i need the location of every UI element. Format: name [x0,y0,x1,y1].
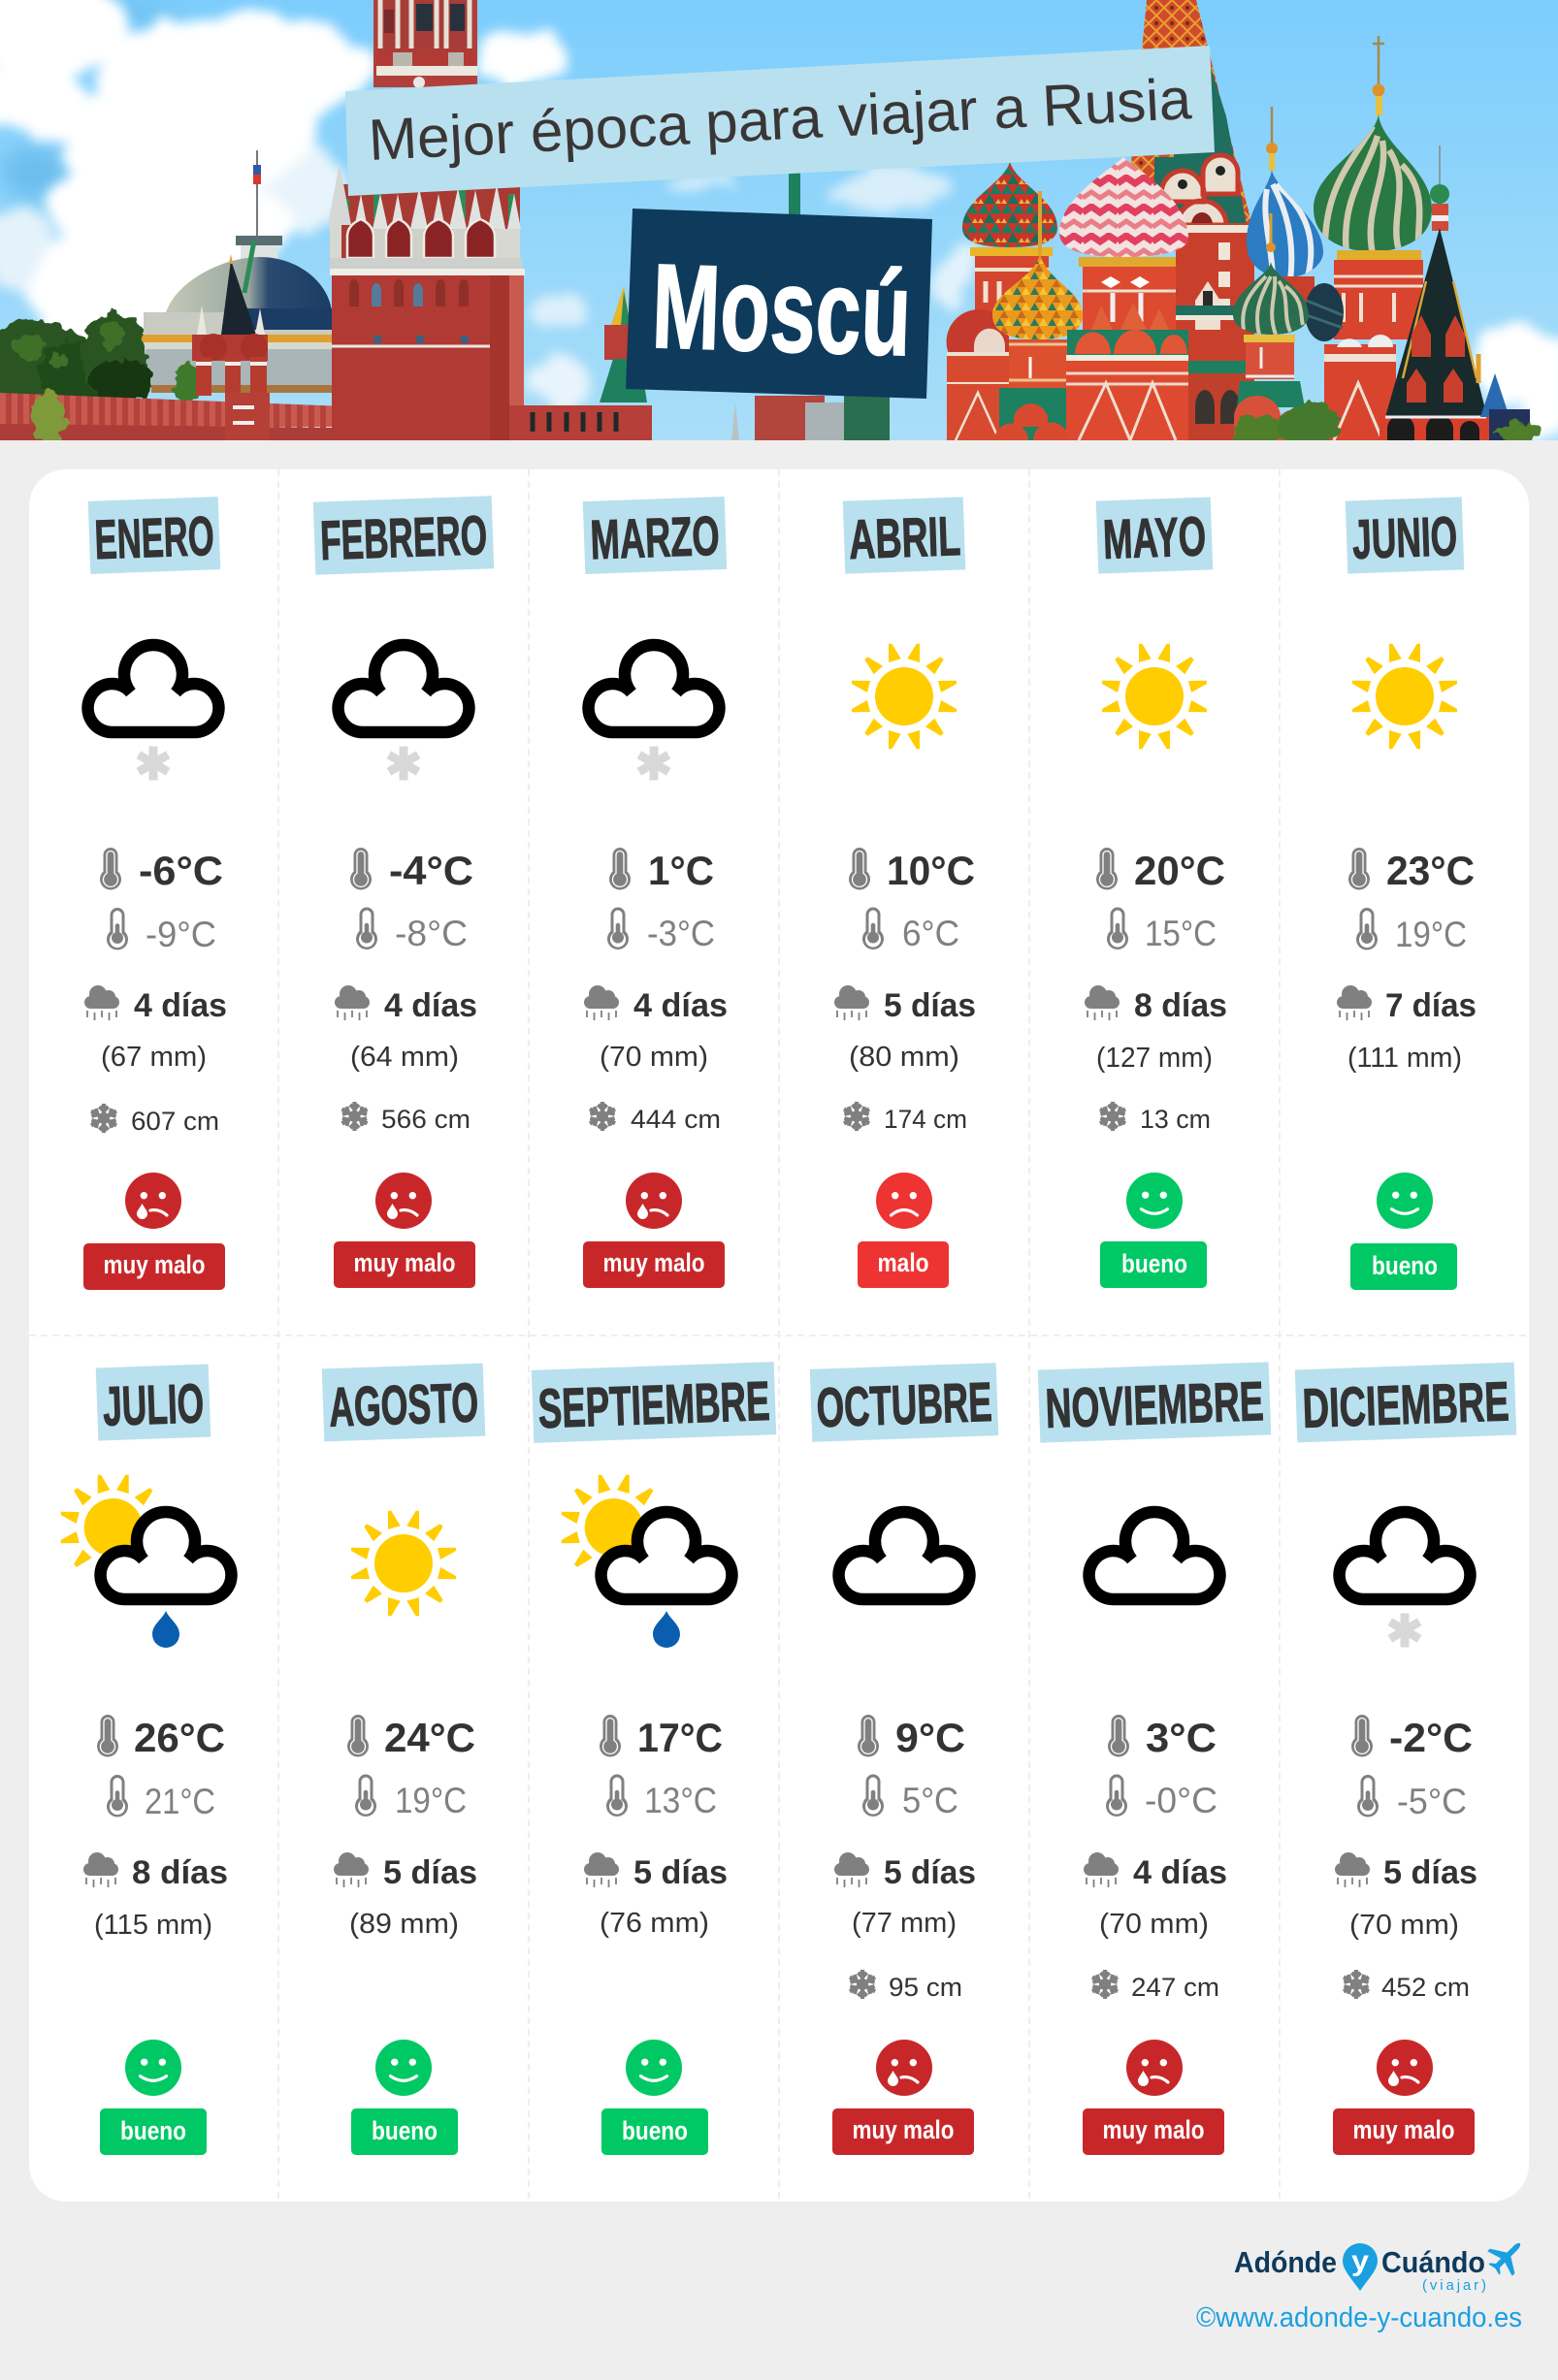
max temperature [1351,1715,1473,1760]
heading: febrero: FEBRERO [319,504,488,572]
rainfall: (127 mm) [1096,1043,1213,1074]
min temperature [606,1775,717,1820]
max temperature [849,848,975,893]
rating: muy malo: muy malo [353,1248,456,1277]
icon: happy face [375,2040,432,2096]
tower base between [1188,393,1239,440]
snowfall: 444 cm [631,1105,721,1134]
logo: Adónde y Cuándo viajar: Adónde [1234,2245,1337,2279]
max temperature: 3°C [1146,1715,1217,1760]
min temperature [355,1775,467,1820]
icon: cloud [1089,1512,1219,1599]
max temperature: 17°C [637,1715,723,1760]
min temperature [862,1775,958,1820]
rainy days: 5 días [633,1854,728,1891]
big green onion [1378,36,1379,92]
rating: malo [858,1241,949,1288]
icon: happy face [1126,1173,1183,1229]
rainfall: (115 mm) [94,1910,212,1941]
rating: bueno [351,2108,458,2155]
Kremlin wall, left [0,388,332,440]
max temperature [100,848,223,893]
clouds [0,0,1558,436]
rainfall: (89 mm) [349,1909,459,1940]
snowfall [842,1102,967,1134]
icon: crying face [1377,2040,1433,2096]
icon: crying face [1126,2040,1183,2096]
title banner [345,46,1215,196]
heading: febrero [313,496,494,575]
month: mayo [1085,497,1227,1288]
rating: muy malo [334,1241,475,1288]
min temperature [107,1775,215,1821]
rainy days [335,985,477,1024]
rating: bueno: bueno [120,2116,186,2145]
title banner: Mejor época para viajar a Rusia [367,66,1193,173]
min temperature [107,908,216,954]
rating: bueno: bueno [372,2116,438,2145]
min temperature: 5°C [902,1781,958,1820]
min temperature: 6°C [902,914,959,953]
rainfall: (70 mm) [600,1042,708,1073]
max temperature [600,1715,723,1760]
max temperature: 26°C [134,1715,225,1760]
icon: cloud with snow [339,645,469,780]
icon: sad face [876,1173,932,1229]
snowfall: 452 cm [1381,1973,1470,2002]
snowfall [1098,1102,1211,1134]
rainy days: 4 días [384,987,477,1024]
max temperature: -2°C [1389,1715,1473,1760]
month: diciembre [1295,1363,1516,2155]
snowfall [89,1104,219,1136]
min temperature: -3°C [647,914,715,953]
rainy days [1337,985,1477,1024]
rainy days: 4 días [1133,1854,1227,1891]
icon: map pin: y [1351,2245,1369,2277]
rainy days [1335,1852,1477,1891]
icon: happy face [626,2040,682,2096]
rainy days: 8 días [132,1854,228,1891]
rainfall: (64 mm) [350,1042,459,1073]
max temperature [1108,1715,1217,1760]
month: febrero [313,496,494,1288]
snowfall [340,1102,471,1134]
rating: muy malo: muy malo [103,1250,206,1279]
rating: bueno [601,2108,708,2155]
rating: muy malo [583,1241,725,1288]
icon: cloud with snow [88,645,218,780]
checker onion and drum [962,162,1057,247]
yellow onion [1038,191,1042,254]
max temperature [350,848,473,893]
max temperature: 10°C [887,848,975,893]
icon: crying face [125,1173,181,1229]
min temperature: -0°C [1145,1781,1217,1820]
snowfall: 566 cm [381,1105,471,1134]
rainy days [834,985,976,1024]
icon: sun [1102,644,1207,749]
dark onion [1305,283,1344,341]
max temperature [1348,848,1475,893]
min temperature [862,908,959,953]
rating: muy malo [832,2108,974,2155]
rainy days: 4 días [134,987,227,1024]
snowfall [1342,1970,1470,2002]
month: junio [1337,497,1477,1290]
month: octubre [810,1363,998,2155]
rainy days [834,1852,976,1891]
heading: junio: JUNIO [1351,505,1458,571]
small green onion [1269,213,1273,242]
rating: bueno: bueno [1372,1251,1438,1280]
rainy days: 7 días [1385,987,1477,1024]
snowfall: 607 cm [131,1107,219,1136]
snowfall: 13 cm [1140,1105,1211,1134]
min temperature: -5°C [1397,1782,1467,1821]
heading: agosto: AGOSTO [328,1371,479,1439]
heading: octubre: OCTUBRE [816,1371,993,1439]
month: noviembre [1038,1362,1271,2155]
heading: octubre [810,1363,998,1442]
rainy days [83,1852,228,1891]
min temperature [1107,908,1217,953]
icon: crying face [626,1173,682,1229]
heading: septiembre: SEPTIEMBRE [537,1370,771,1440]
icon: sun [1352,644,1457,749]
city banner [626,209,932,399]
min temperature: 19°C [1395,915,1467,954]
heading: abril [843,497,965,574]
snowfall: 247 cm [1131,1973,1219,2002]
min temperature [1357,1775,1467,1821]
rainfall: (67 mm) [101,1042,207,1073]
snowfall [848,1970,962,2002]
rating: muy malo [1333,2108,1475,2155]
max temperature: -4°C [389,848,473,893]
max temperature: -6°C [139,848,223,893]
heading: septiembre [532,1362,776,1443]
snowfall [1090,1970,1219,2002]
icon: plane [1481,2231,1533,2282]
heading: marzo [583,497,727,574]
max temperature [609,848,714,893]
St Basil's Cathedral [947,0,1530,440]
heading: mayo: MAYO [1102,505,1207,571]
min temperature: 19°C [395,1781,467,1820]
rating: bueno: bueno [1121,1249,1187,1278]
logo: Adónde y Cuándo viajar: (viajar) [1422,2277,1486,2294]
min temperature [1106,1775,1217,1820]
website credit: ©www.adonde-y-cuando.es [1196,2302,1522,2333]
rainy days: 5 días [884,1854,976,1891]
rainfall: (77 mm) [852,1908,957,1939]
icon: cloud with snow [1340,1512,1470,1647]
heading: agosto [322,1364,485,1441]
central tower [1176,223,1254,393]
pink onion [1059,157,1188,257]
rainy days [584,1852,728,1891]
city banner: Moscú [650,240,913,381]
small Kremlin tower [192,254,268,396]
snowfall: 174 cm [884,1105,967,1134]
Kremlin Senate dome [136,150,332,393]
rainfall: (111 mm) [1347,1043,1462,1074]
rainfall: (76 mm) [600,1908,709,1939]
snowfall: 95 cm [889,1973,962,2002]
heading: julio: JULIO [102,1372,205,1438]
rainy days [1085,985,1227,1024]
rainfall: (80 mm) [849,1042,959,1073]
max temperature: 23°C [1386,848,1475,893]
heading: noviembre [1038,1362,1271,1443]
rating: muy malo [1083,2108,1224,2155]
icon: sun [351,1511,456,1616]
max temperature: 9°C [895,1715,965,1760]
central spire [1125,0,1251,223]
heading: enero: ENERO [94,505,215,571]
icon: cloud [839,1512,969,1599]
icon: happy face [125,2040,181,2096]
heading: junio [1346,497,1464,574]
heading: enero [88,497,220,574]
Kremlin wall, right and green tower [509,173,890,440]
panel: monthly climate card [29,469,1529,2202]
rating: malo: malo [877,1248,929,1277]
icon: sun [852,644,957,749]
rating: muy malo: muy malo [603,1248,704,1277]
rainfall: (70 mm) [1349,1910,1459,1941]
logo: Adónde y Cuándo viajar [1234,2231,1533,2294]
rating: bueno [1100,1241,1207,1288]
tent tower [1439,145,1441,184]
rainy days [1084,1852,1227,1891]
max temperature: 1°C [648,848,714,893]
icon: sun behind cloud with rain drop [562,1475,731,1648]
trees [0,312,200,404]
min temperature: -9°C [146,915,216,954]
rainy days: 5 días [383,1854,477,1891]
rating: bueno [100,2108,207,2155]
rainfall: (70 mm) [1099,1909,1209,1940]
max temperature [858,1715,965,1760]
rainy days: 4 días [633,987,728,1024]
min temperature: -8°C [395,914,468,953]
min temperature: 15°C [1145,914,1217,953]
heading: noviembre: NOVIEMBRE [1045,1370,1265,1440]
max temperature: 24°C [384,1715,475,1760]
min temperature [356,908,468,953]
snowfall [588,1102,721,1134]
rainy days: 8 días [1134,987,1227,1024]
month: julio [61,1364,231,2155]
month: agosto [322,1364,485,2155]
month: enero [83,497,227,1290]
min temperature: 13°C [644,1781,717,1820]
heading: julio [96,1364,211,1441]
month: septiembre [532,1362,776,2155]
bushes [1232,403,1542,446]
rainy days [84,985,227,1024]
max temperature: 20°C [1134,848,1225,893]
rating: muy malo: muy malo [1102,2115,1205,2144]
icon: happy face [1377,1173,1433,1229]
heading: abril: ABRIL [848,505,961,571]
heading: mayo [1096,497,1213,574]
min temperature: 21°C [145,1782,215,1821]
big onion drum [1337,250,1421,260]
month: marzo [583,497,728,1288]
rating: muy malo [83,1243,225,1290]
icon: crying face [375,1173,432,1229]
logo: Adónde y Cuándo viajar: Cuándo [1381,2245,1485,2279]
rating: muy malo: muy malo [852,2115,955,2144]
icon: crying face [876,2040,932,2096]
header photo: Red Square, Moscow [0,0,1558,446]
icon: cloud with snow [589,645,719,780]
month: abril [834,497,976,1288]
Spasskaya tower [328,0,525,440]
rating: bueno [1350,1243,1457,1290]
rainy days: 5 días [1383,1854,1477,1891]
min temperature [1356,908,1467,954]
rainy days [584,985,728,1024]
heading: marzo: MARZO [590,505,721,571]
icon: sun behind cloud with rain drop [61,1475,231,1648]
min temperature [607,908,715,953]
icon: map pin [1343,2243,1378,2291]
rainy days [334,1852,477,1891]
rating: bueno: bueno [622,2116,688,2145]
rainy days: 5 días [884,987,976,1024]
rating: muy malo: muy malo [1352,2115,1455,2144]
blue onion [1271,107,1273,144]
